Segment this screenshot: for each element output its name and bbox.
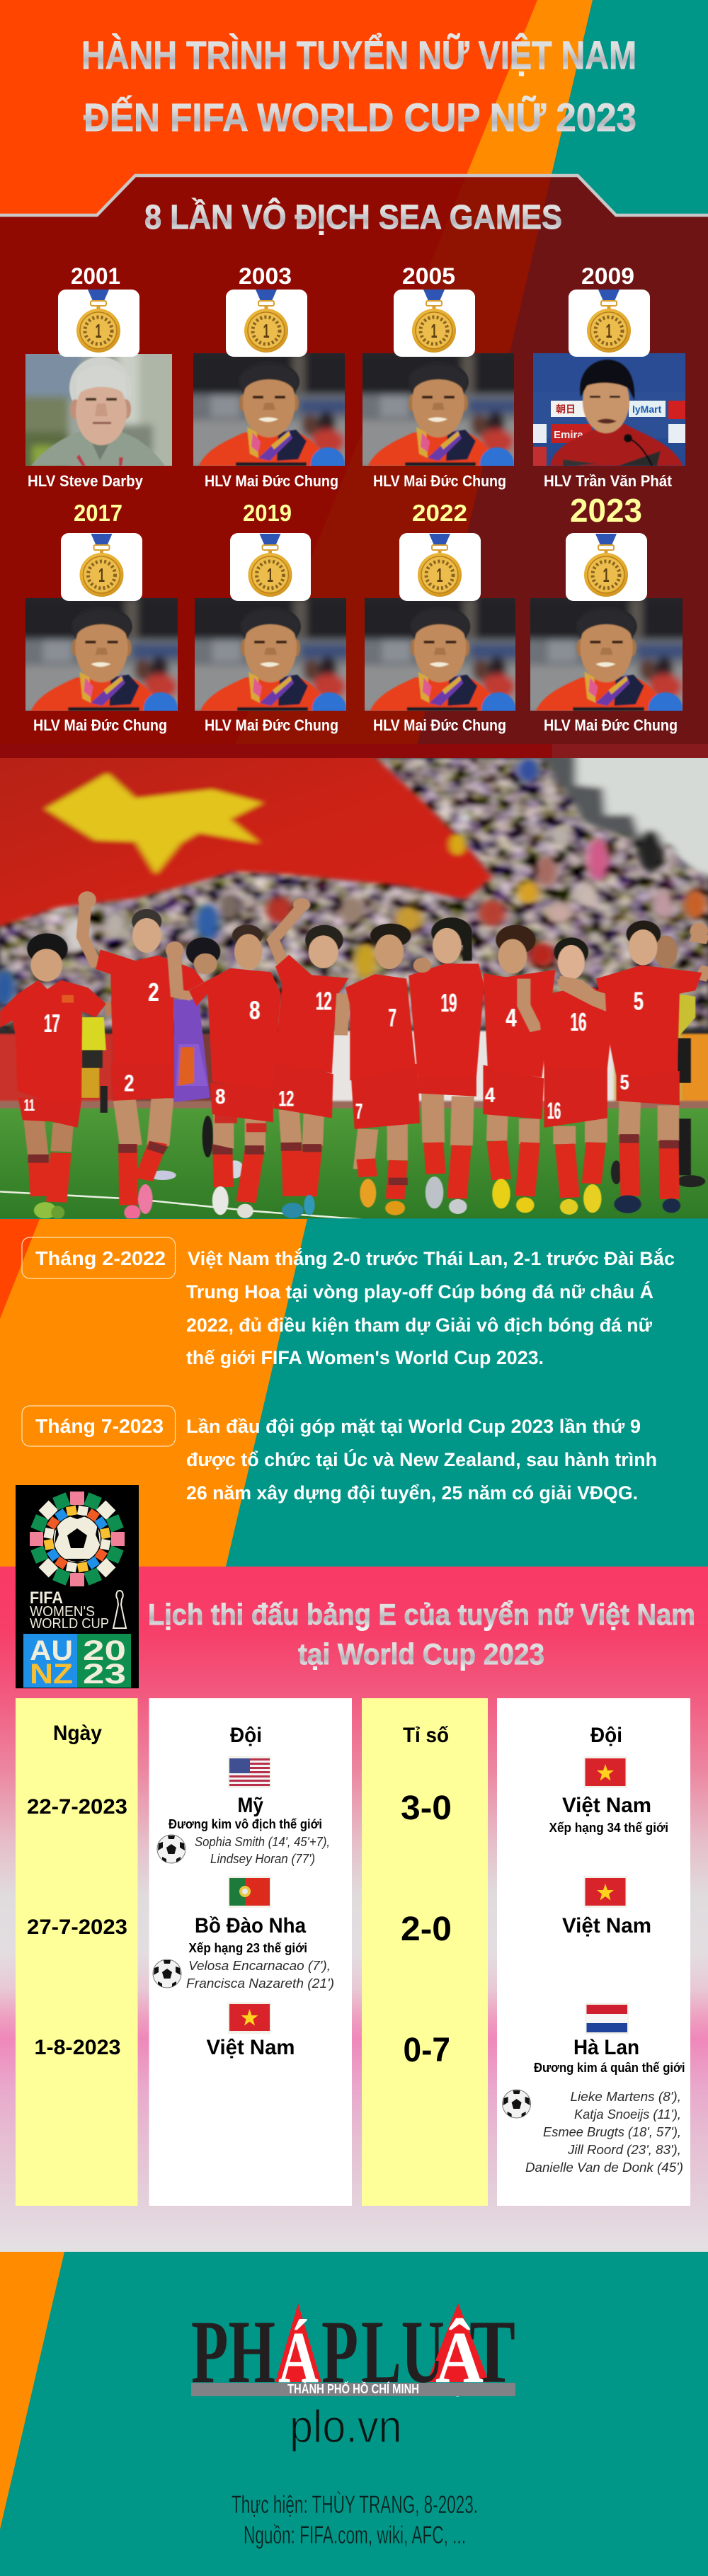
card: 2019 Mai Đức Chung: HLV Mai Đức Chung bbox=[205, 716, 338, 734]
timeline: July 2023: Lần đầu đội góp mặt tại World Cup 2023 lần thứ 9 bbox=[186, 1416, 641, 1437]
player 16: 16 bbox=[571, 1007, 587, 1036]
card: 2005 Mai Đức Chung: HLV Mai Đức Chung bbox=[373, 472, 506, 490]
dark red strip above photo bbox=[0, 744, 708, 758]
photo: Vietnam women's team celebrating bbox=[0, 752, 708, 1220]
logo: FIFA Women's World Cup 2023: WORLD CUP bbox=[30, 1616, 109, 1632]
icon: soccer ball bbox=[157, 1835, 185, 1863]
timeline: February 2022 bbox=[22, 1237, 675, 1368]
icon: Portugal flag bbox=[228, 1876, 271, 1908]
table column: score: Tỉ số bbox=[403, 1724, 449, 1747]
table column: team 1: Đương kim vô địch thế giới bbox=[169, 1817, 322, 1831]
panel: SEA Games dark red band bbox=[0, 176, 708, 744]
table column: team 2 bbox=[497, 1698, 690, 2206]
timeline: February 2022: Tháng 2-2022 bbox=[35, 1247, 166, 1269]
heading: group E schedule: tại World Cup 2023 bbox=[298, 1637, 544, 1671]
table column: score: 3-0 bbox=[401, 1790, 452, 1827]
credits: Thực hiện: THÙY TRANG, 8-2023. bbox=[232, 2491, 478, 2519]
player 12: 12 bbox=[316, 987, 332, 1015]
player 2: 2 bbox=[124, 1070, 134, 1097]
table column: score bbox=[362, 1698, 488, 2206]
table column: dates: 22-7-2023 bbox=[27, 1795, 127, 1819]
table column: team 1: Sophia Smith (14', 45'+7), bbox=[195, 1834, 330, 1849]
card: 2005 Mai Đức Chung: 2005 bbox=[402, 263, 455, 289]
table column: dates: 1-8-2023 bbox=[34, 2036, 120, 2059]
card: 2005 Mai Đức Chung: 1 bbox=[430, 320, 438, 342]
table column: team 2: Esmee Brugts (18', 57'), bbox=[543, 2124, 681, 2139]
logo: FIFA Women's World Cup 2023: 23 bbox=[83, 1659, 126, 1690]
table column: dates: Ngày bbox=[53, 1722, 102, 1745]
table column: team 1: Bồ Đào Nha bbox=[195, 1914, 306, 1937]
card: 2009 Trần Văn Phát: HLV Trần Văn Phát bbox=[544, 472, 673, 490]
table column: dates bbox=[16, 1698, 137, 2206]
card: 2019 Mai Đức Chung bbox=[188, 500, 353, 734]
table column: team 2: Jill Roord (23', 83'), bbox=[567, 2142, 681, 2157]
title bbox=[81, 33, 636, 139]
table column: team 1: Đội bbox=[230, 1724, 262, 1747]
logo: Pháp Luật: P bbox=[321, 2303, 358, 2402]
timeline: February 2022: 2022, đủ điều kiện tham dự Giải vô địch bóng đá nữ bbox=[186, 1315, 652, 1336]
logo: Pháp Luật: Ậ bbox=[435, 2317, 484, 2398]
table column: score: 0-7 bbox=[404, 2032, 450, 2069]
title: ĐẾN FIFA WORLD CUP NỮ 2023 bbox=[84, 95, 636, 139]
table column: team 2: Việt Nam bbox=[562, 1794, 651, 1817]
player 4 bbox=[483, 925, 555, 1213]
icon: Vietnam flag bbox=[583, 1876, 627, 1908]
player 5: 5 bbox=[634, 987, 644, 1015]
card: 2023 Mai Đức Chung: HLV Mai Đức Chung bbox=[544, 716, 678, 734]
card: 2003 Mai Đức Chung: HLV Mai Đức Chung bbox=[205, 472, 338, 490]
timeline: July 2023 bbox=[22, 1406, 657, 1504]
player 8: 8 bbox=[249, 996, 260, 1024]
photo background: crowd texture bbox=[0, 758, 708, 1035]
card: 2017 Mai Đức Chung bbox=[18, 500, 185, 734]
card: 2017 Mai Đức Chung: HLV Mai Đức Chung bbox=[33, 716, 167, 734]
icon: Netherlands flag bbox=[585, 2003, 629, 2034]
icon: Vietnam flag bbox=[583, 1756, 627, 1788]
logo: Pháp Luật bbox=[191, 2303, 515, 2402]
table column: team 2: Xếp hạng 34 thế giới bbox=[549, 1821, 668, 1835]
player 19 bbox=[409, 917, 484, 1214]
card: 2003 Mai Đức Chung: 1 bbox=[263, 320, 269, 342]
photo background: giant Vietnamese flag bbox=[0, 752, 492, 927]
logo: Pháp Luật: LU bbox=[361, 2303, 445, 2402]
player 19: 19 bbox=[440, 988, 457, 1017]
logo: FIFA Women's World Cup 2023: NZ bbox=[30, 1659, 73, 1690]
logo: FIFA Women's World Cup 2023: AU bbox=[30, 1635, 73, 1666]
player 4: 4 bbox=[506, 1003, 517, 1032]
card: 2023 Mai Đức Chung bbox=[523, 492, 690, 734]
timeline: July 2023: 26 năm xây dựng đội tuyển, 25 năm có giải VĐQG. bbox=[186, 1482, 638, 1504]
player 5: 5 bbox=[620, 1071, 629, 1094]
card: 2003 Mai Đức Chung bbox=[186, 263, 352, 490]
background: pink schedule section bbox=[0, 1567, 708, 2252]
card: 2017 Mai Đức Chung: 2017 bbox=[74, 500, 122, 526]
card: 2009 Trần Văn Phát: 1 bbox=[606, 320, 612, 342]
player 2 bbox=[78, 891, 204, 1220]
table column: team 1: Mỹ bbox=[238, 1794, 263, 1817]
card: 2022 Mai Đức Chung: 2022 bbox=[412, 500, 467, 526]
logo: FIFA Women's World Cup 2023: WOMEN'S bbox=[30, 1604, 95, 1620]
card: 2001 Steve Darby: 1 bbox=[95, 320, 102, 342]
card: 2001 Steve Darby: 2001 bbox=[71, 263, 120, 289]
card: 2023 Mai Đức Chung: 2023 bbox=[570, 492, 642, 529]
table column: team 2: Danielle Van de Donk (45') bbox=[525, 2160, 683, 2175]
photo: pitch bbox=[0, 1109, 708, 1218]
player 12 bbox=[273, 898, 348, 1218]
card: 2022 Mai Đức Chung: HLV Mai Đức Chung bbox=[373, 716, 506, 734]
timeline: February 2022: Trung Hoa tại vòng play-off Cúp bóng đá nữ châu Á bbox=[186, 1281, 653, 1303]
logo: Pháp Luật: Á bbox=[278, 2317, 319, 2398]
player 16: 16 bbox=[547, 1098, 561, 1124]
card: 2009 Trần Văn Phát bbox=[533, 263, 685, 490]
card: 2001 Steve Darby bbox=[18, 263, 178, 490]
player 17 bbox=[0, 933, 112, 1219]
photo background: stand and crowd bbox=[0, 752, 708, 1040]
timeline: July 2023: được tổ chức tại Úc và New Zealand, sau hành trình bbox=[186, 1448, 657, 1470]
table column: dates: 27-7-2023 bbox=[27, 1916, 127, 1939]
website: plo.vn: plo.vn bbox=[290, 2400, 402, 2452]
player 17: 11 bbox=[24, 1097, 35, 1114]
logo: Pháp Luật: THÀNH PHỐ HỒ CHÍ MINH bbox=[287, 2381, 419, 2396]
card: 2017 Mai Đức Chung: 1 bbox=[98, 564, 105, 586]
player 4: 4 bbox=[485, 1084, 495, 1107]
player 12: 12 bbox=[279, 1086, 294, 1111]
timeline: February 2022: Việt Nam thắng 2-0 trước Thái Lan, 2-1 trước Đài Bắc bbox=[188, 1247, 675, 1269]
heading: 8 SEA Games wins: 8 LẦN VÔ ĐỊCH SEA GAMES bbox=[144, 198, 562, 236]
background: footer teal with orange sliver bbox=[0, 2252, 708, 2576]
table column: team 2: Đội bbox=[590, 1724, 622, 1747]
table column: team 1 bbox=[149, 1698, 352, 2206]
player 16 bbox=[524, 937, 615, 1215]
background: header red, orange and teal diagonal bands bbox=[0, 0, 708, 758]
table column: team 1: Francisca Nazareth (21') bbox=[186, 1976, 334, 1991]
logo: FIFA Women's World Cup 2023 bbox=[16, 1485, 139, 1690]
player 7: 7 bbox=[355, 1098, 362, 1123]
photo background: advertising boards and track bbox=[0, 1031, 708, 1111]
heading: group E schedule bbox=[148, 1598, 695, 1671]
table column: team 2: Đương kim á quân thế giới bbox=[534, 2061, 685, 2075]
card: 2022 Mai Đức Chung: 1 bbox=[436, 564, 443, 586]
card: 2005 Mai Đức Chung bbox=[355, 263, 521, 490]
card: 2019 Mai Đức Chung: 2019 bbox=[243, 500, 292, 526]
table column: team 2: Việt Nam bbox=[562, 1914, 651, 1937]
card: 2019 Mai Đức Chung: 1 bbox=[267, 564, 273, 586]
card: 2023 Mai Đức Chung: 1 bbox=[603, 564, 609, 586]
player 8: 8 bbox=[215, 1086, 225, 1109]
player 7 bbox=[341, 924, 420, 1215]
timeline: July 2023: Tháng 7-2023 bbox=[35, 1415, 164, 1437]
table column: score: 2-0 bbox=[401, 1911, 452, 1948]
logo: Pháp Luật: PH bbox=[191, 2303, 275, 2402]
table column: team 1: Velosa Encarnacao (7'), bbox=[188, 1958, 331, 1973]
player 5 bbox=[556, 920, 708, 1213]
background: timeline section with red, orange and teal bands bbox=[0, 1219, 708, 1567]
card: 2009 Trần Văn Phát: 2009 bbox=[581, 263, 634, 289]
credits: Nguồn: FIFA.com, wiki, AFC, ... bbox=[244, 2521, 466, 2549]
icon: Vietnam flag bbox=[228, 2002, 271, 2034]
card: 2001 Steve Darby: HLV Steve Darby bbox=[28, 472, 144, 490]
table column: team 1: Xếp hạng 23 thế giới bbox=[188, 1941, 307, 1955]
table column: team 1: Việt Nam bbox=[207, 2036, 295, 2059]
player 8 bbox=[166, 925, 281, 1218]
player 17: 17 bbox=[44, 1009, 60, 1038]
logo: FIFA Women's World Cup 2023: FIFA bbox=[30, 1588, 63, 1608]
table column: team 2: Katja Snoeijs (11'), bbox=[574, 2107, 681, 2122]
player 7: 7 bbox=[389, 1003, 396, 1032]
logo: Pháp Luật: T bbox=[469, 2303, 515, 2402]
timeline: February 2022: thế giới FIFA Women's World Cup 2023. bbox=[186, 1347, 544, 1368]
table column: team 1: Lindsey Horan (77') bbox=[210, 1851, 315, 1866]
table column: team 2: Lieke Martens (8'), bbox=[571, 2089, 681, 2104]
card: 2003 Mai Đức Chung: 2003 bbox=[239, 263, 292, 289]
icon: soccer ball bbox=[153, 1959, 181, 1988]
photo: referees and goalkeeper bbox=[81, 935, 705, 1187]
table column: team 2: Hà Lan bbox=[573, 2036, 639, 2059]
player 2: 2 bbox=[148, 978, 159, 1007]
logo: FIFA Women's World Cup 2023: 20 bbox=[83, 1635, 126, 1666]
credits bbox=[232, 2491, 478, 2549]
card: 2022 Mai Đức Chung bbox=[358, 500, 523, 734]
icon: USA flag bbox=[228, 1756, 271, 1788]
icon: soccer ball bbox=[503, 2090, 531, 2118]
